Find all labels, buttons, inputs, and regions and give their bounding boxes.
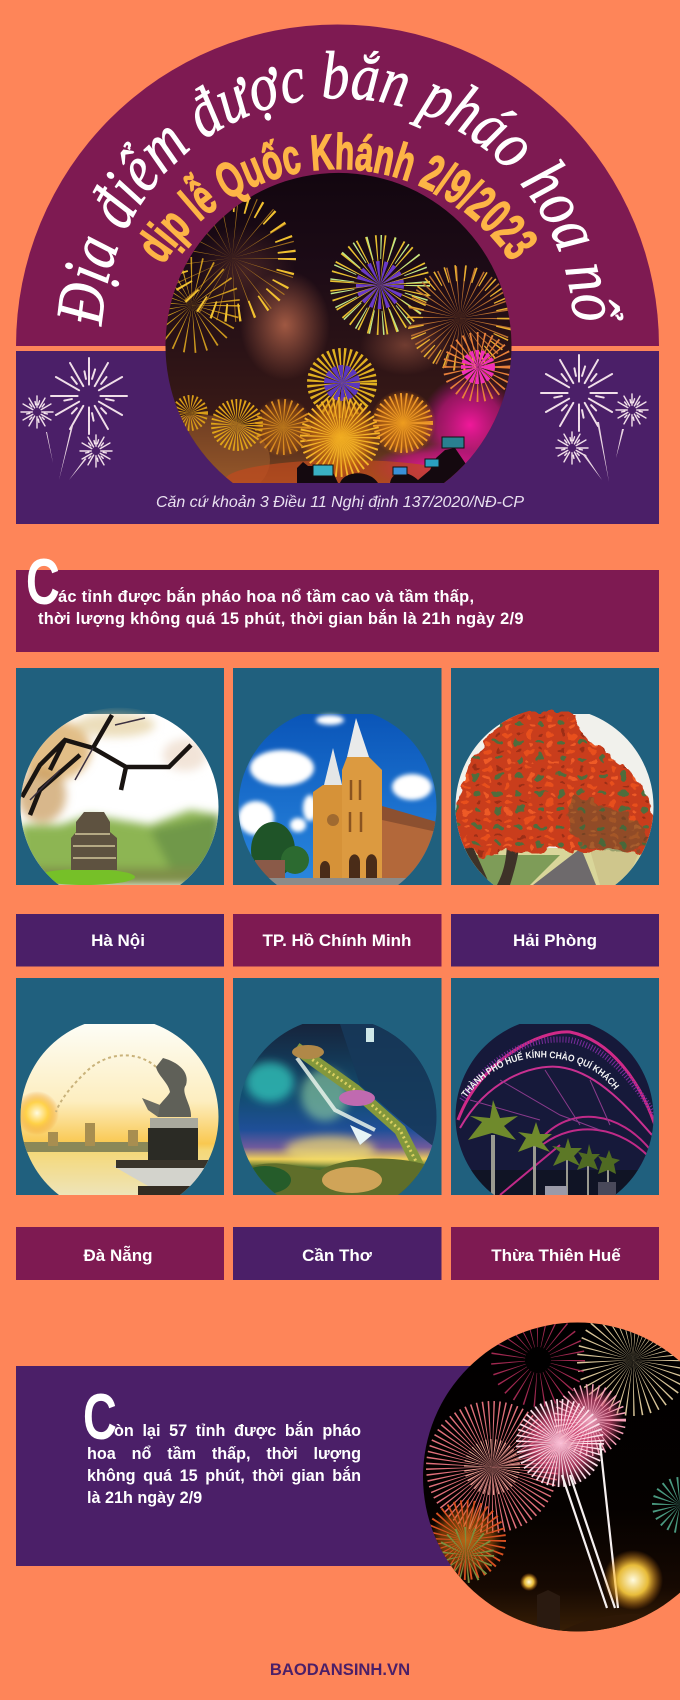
remaining provinces text: hoa nổ tầm thấp, thời lượng (87, 1444, 361, 1462)
label: TP. Ho Chi Minh (233, 914, 442, 966)
remaining provinces text: không quá 15 phút, thời gian bắn (87, 1466, 361, 1484)
flash and building (520, 1550, 662, 1632)
burst: small green right (666, 1491, 680, 1519)
icon: fireworks right (541, 355, 648, 482)
burst: gold-violet (325, 366, 359, 400)
rocket trails (562, 1443, 618, 1608)
intro text: ác tỉnh được bắn pháo hoa nổ tầm cao và tầm thấp, (58, 587, 474, 606)
audience with phones (297, 437, 470, 483)
label: Da Nang (16, 1227, 224, 1280)
panel: Can Tho photo (233, 978, 442, 1195)
bursts: low gold and orange (181, 390, 436, 477)
burst: large pink (459, 1434, 525, 1500)
label: Da Nang: Đà Nẵng (84, 1245, 152, 1265)
burst: lower left orange (430, 1504, 502, 1576)
legal basis note: Căn cứ khoản 3 Điều 11 Nghị định 137/2020/NĐ-CP (156, 494, 524, 511)
panel: Hai Phong photo (451, 668, 659, 885)
label: Hai Phong (451, 914, 659, 966)
label: Ha Noi (16, 914, 224, 966)
burst: top right cream (605, 1332, 661, 1388)
label: Thua Thien Hue (451, 1227, 659, 1280)
burst: center gold-purple (342, 247, 418, 323)
title: curved main heading: Địa điểm được bắn pháo hoa nổ (57, 50, 624, 327)
remaining provinces text (87, 1421, 361, 1507)
burst: right orange (415, 273, 505, 363)
burst: bright pink (515, 1386, 624, 1488)
hero photo: fireworks (166, 172, 512, 483)
header arch panel (16, 24, 659, 346)
panel: remaining provinces (16, 1366, 516, 1566)
arch sign text: THÀNH PHỐ HUẾ KÍNH CHÀO QUÍ KHÁCH (460, 1049, 620, 1096)
photo: fireworks circle (420, 1320, 680, 1640)
intro text (26, 547, 524, 628)
label: Thua Thien Hue: Thừa Thiên Huế (491, 1246, 621, 1265)
icon: fireworks left (21, 358, 127, 480)
subtitle: curved date heading: dịp lễ Quốc Khánh 2/9/2023 (139, 132, 537, 262)
burst: dark pink sparks (508, 1330, 568, 1390)
header lower band (16, 351, 659, 524)
intro text: thời lượng không quá 15 phút, thời gian bắn là 21h ngày 2/9 (38, 609, 524, 628)
label: Can Tho: Cần Thơ (302, 1246, 373, 1265)
drop cap C: C (83, 1382, 117, 1454)
panel: Ha Noi photo (16, 668, 224, 885)
panel: Thua Thien Hue photo (451, 978, 659, 1195)
panel: Da Nang photo (15, 978, 224, 1196)
remaining provinces text: òn lại 57 tỉnh được bắn pháo (114, 1422, 361, 1440)
label: TP. Ho Chi Minh: TP. Hồ Chính Minh (263, 931, 411, 950)
label: Hai Phong: Hải Phòng (513, 931, 597, 950)
label: Ha Noi: Hà Nội (91, 931, 145, 950)
intro text: C (26, 547, 60, 619)
burst: left gold (168, 203, 287, 329)
remaining provinces text: là 21h ngày 2/9 (87, 1489, 202, 1507)
panel: intro banner (16, 570, 659, 652)
panel: TP. Ho Chi Minh photo (233, 668, 442, 885)
burst: magenta (460, 349, 496, 385)
footer source: BAODANSINH.VN (270, 1660, 410, 1679)
label: Can Tho (233, 1227, 442, 1280)
